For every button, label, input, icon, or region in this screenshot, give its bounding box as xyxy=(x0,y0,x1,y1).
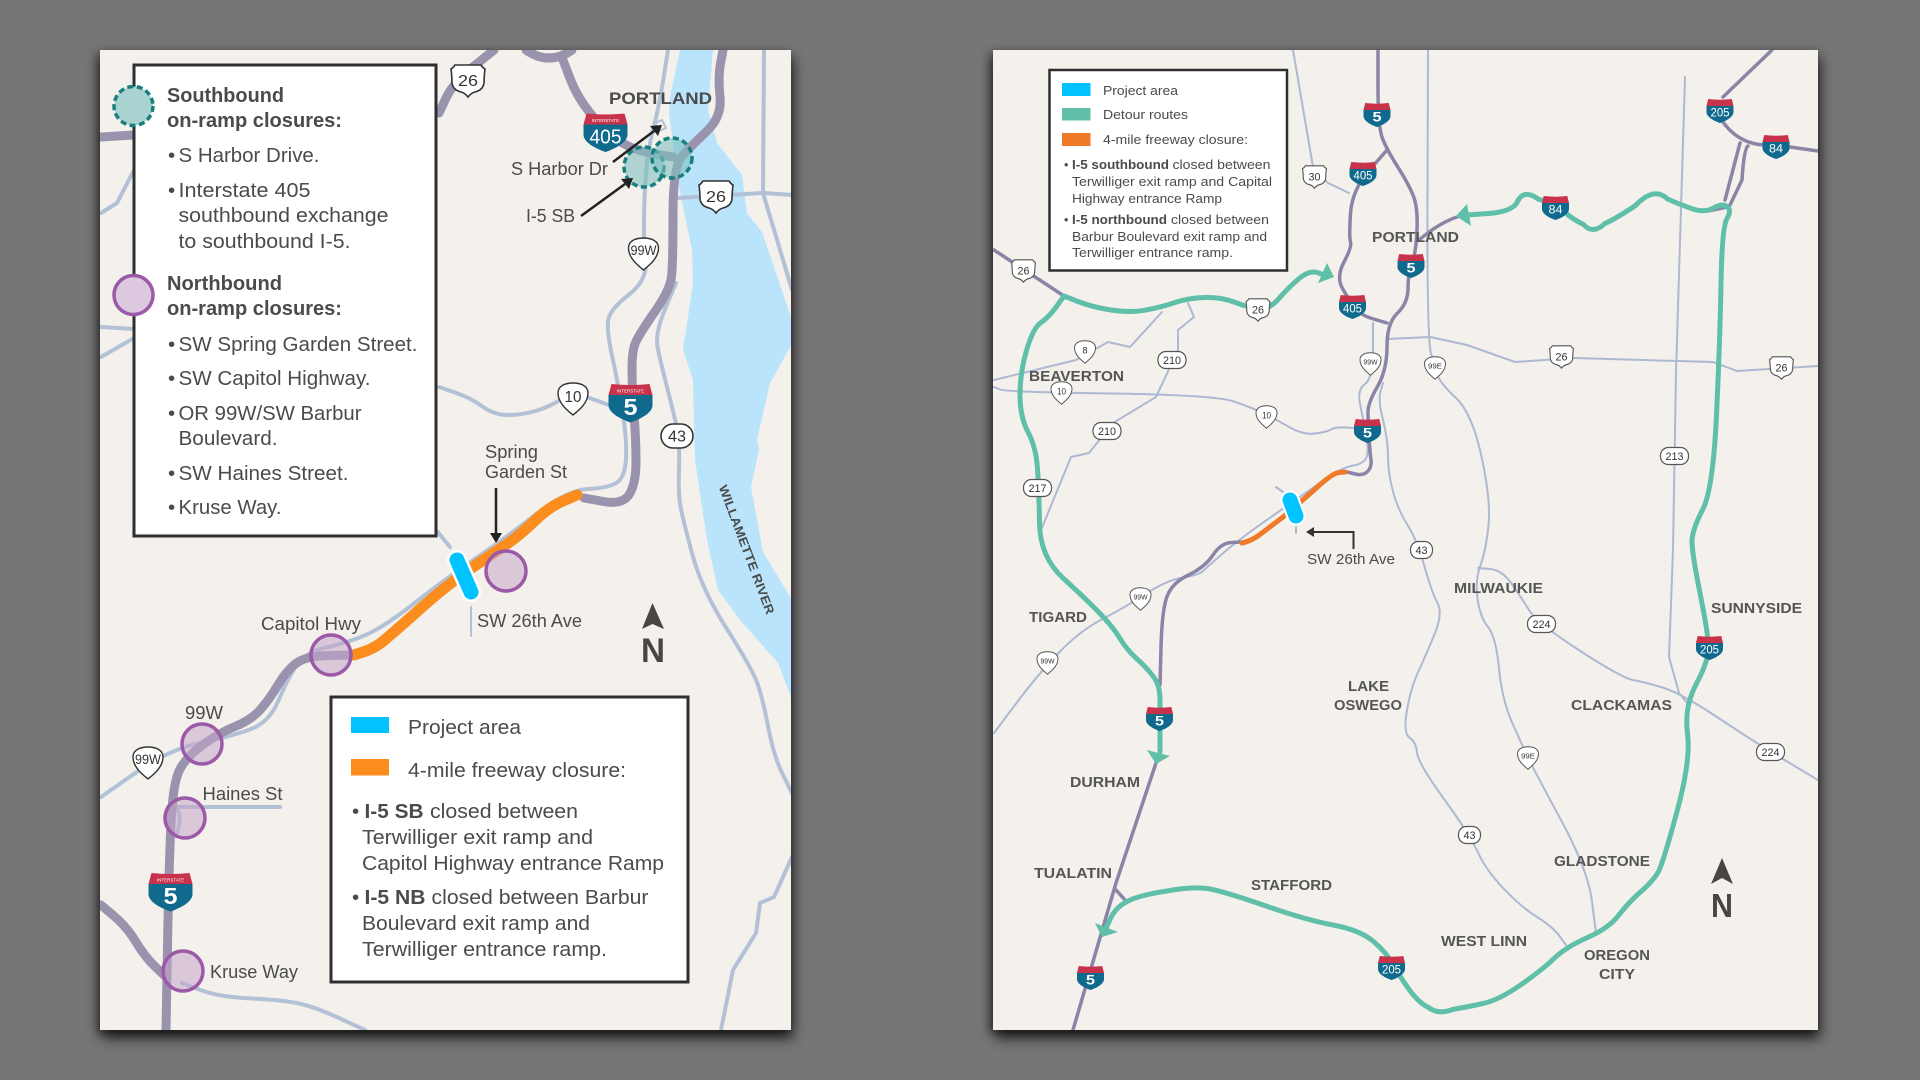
interstate shields: 5 xyxy=(1372,108,1382,124)
city labels: CLACKAMAS xyxy=(1571,698,1672,714)
shield: I-405: 405 xyxy=(590,126,622,148)
swatch: project area xyxy=(351,717,389,733)
river: Willamette xyxy=(669,50,792,700)
teardrop route shields: 99W xyxy=(1134,593,1148,602)
shield: I-405 xyxy=(584,114,628,152)
city labels xyxy=(1029,230,1802,983)
southbound closures text: Interstate 405 xyxy=(178,179,310,202)
US highway shields: 26 xyxy=(1776,363,1787,374)
city labels: OREGON xyxy=(1584,948,1650,964)
interstate shields: 205 xyxy=(1700,642,1719,656)
shield: US 26 xyxy=(451,65,485,97)
minor roads xyxy=(994,50,1818,945)
freeways xyxy=(101,50,723,1030)
legend: detour map: Detour routes xyxy=(1103,108,1188,122)
shield: I-405: INTERSTATE xyxy=(592,118,619,123)
legend: detour map: Project area xyxy=(1103,84,1178,98)
southbound closures text: on-ramp closures: xyxy=(167,109,342,132)
north arrow: N xyxy=(641,632,665,670)
shield: US 26 east xyxy=(699,181,733,213)
map labels: Spring xyxy=(485,442,538,462)
southbound closures text: • xyxy=(168,179,175,202)
city labels: TIGARD xyxy=(1029,610,1087,626)
shield: 99W north xyxy=(628,238,658,270)
state route pills: 224 xyxy=(1762,747,1780,759)
legend: project area and freeway closure: Capitol Highway entrance Ramp xyxy=(362,852,664,875)
city labels: OSWEGO xyxy=(1334,698,1402,714)
legend: project area and freeway closure: I-5 SB xyxy=(364,800,424,823)
legend: project area and freeway closure: Boulevard exit ramp and xyxy=(362,912,590,935)
map labels: Haines St xyxy=(202,784,282,804)
panel: on-ramp closures map xyxy=(100,50,791,1030)
northbound closures text: SW Haines Street. xyxy=(178,462,348,485)
detour route: west xyxy=(1020,296,1170,764)
northbound closures text: on-ramp closures: xyxy=(167,297,342,320)
map labels: SW 26th Ave xyxy=(477,611,582,631)
legend: detour map: • xyxy=(1064,158,1068,172)
teardrop route shields: 99E xyxy=(1521,752,1535,761)
city labels: GLADSTONE xyxy=(1554,854,1650,870)
map labels: 99W xyxy=(185,703,223,723)
legend: detour map: Highway entrance Ramp xyxy=(1072,192,1222,206)
legend: project area and freeway closure: Project area xyxy=(408,716,522,739)
city labels: LAKE xyxy=(1348,679,1389,695)
map labels: Capitol Hwy xyxy=(261,614,361,634)
US highway shields: 30 xyxy=(1309,172,1320,183)
swatch: project area xyxy=(1062,83,1090,96)
legend: project area and freeway closure: closed between Barbur xyxy=(432,886,649,909)
map labels: I-5 SB xyxy=(526,206,575,226)
shield: US 26: 26 xyxy=(458,73,478,90)
US highway shields: 26 xyxy=(1252,305,1264,316)
northbound closures text: • xyxy=(168,333,175,356)
swatch: freeway closure xyxy=(351,759,389,776)
northbound closures text: Northbound xyxy=(167,272,282,295)
shield: I-5 north: 5 xyxy=(623,394,638,420)
state route pills: 217 xyxy=(1028,483,1046,495)
city labels: MILWAUKIE xyxy=(1454,581,1543,597)
state route pills: 210 xyxy=(1163,355,1181,367)
arrowhead: I-5 Tualatin xyxy=(1095,923,1118,937)
northbound closures text: • xyxy=(168,367,175,390)
north arrow xyxy=(641,603,665,670)
arrow: SW 26th Ave xyxy=(1306,527,1354,549)
state route pills: 213 xyxy=(1666,451,1684,463)
city labels: SUNNYSIDE xyxy=(1711,601,1802,617)
swatch: detour routes xyxy=(1062,108,1090,120)
southbound closures text: Southbound xyxy=(167,84,284,107)
city labels: BEAVERTON xyxy=(1029,369,1124,385)
teardrop route shields: 99E xyxy=(1428,362,1442,371)
interstate shields xyxy=(1077,99,1790,990)
state route pills: 43 xyxy=(1464,830,1476,842)
label: SW 26th Ave: SW 26th Ave xyxy=(1307,551,1395,568)
legend: detour map: 4-mile freeway closure: xyxy=(1103,133,1248,147)
project area bar xyxy=(457,560,471,592)
shield: I-5 north xyxy=(608,384,652,422)
state route pills: 43 xyxy=(1416,545,1428,557)
northbound closures text: Kruse Way. xyxy=(178,496,282,519)
state route pills: 210 xyxy=(1098,426,1116,438)
shield: I-5 south: 5 xyxy=(163,883,178,909)
arrowhead: I-84 xyxy=(1456,204,1471,226)
map labels xyxy=(185,89,712,982)
interstate shields: 405 xyxy=(1354,168,1373,182)
legend: project area and freeway closure: I-5 NB xyxy=(364,886,426,909)
interstate shields: 205 xyxy=(1710,106,1730,120)
freeway closure segment xyxy=(354,495,577,655)
legend: project area and freeway closure: 4-mile freeway closure: xyxy=(408,759,626,782)
southbound closures text: to southbound I-5. xyxy=(178,230,350,253)
northbound closures text: Boulevard. xyxy=(178,427,278,450)
interstate shields: 405 xyxy=(1343,302,1362,316)
interstate shields: 5 xyxy=(1086,972,1095,988)
legend: project area and freeway closure xyxy=(331,697,688,982)
project area bar xyxy=(1290,500,1296,516)
teardrop route shields: 10 xyxy=(1057,386,1066,396)
interstate shields: 5 xyxy=(1155,712,1164,728)
southbound closures text: S Harbor Drive. xyxy=(178,144,320,167)
map labels: Garden St xyxy=(485,462,567,482)
legend: detour map: I-5 southbound xyxy=(1072,158,1169,172)
state route pills: 224 xyxy=(1532,619,1550,631)
legend: detour map: I-5 northbound xyxy=(1072,213,1167,227)
city labels: STAFFORD xyxy=(1251,878,1332,894)
icon: southbound circle xyxy=(114,86,153,126)
map labels: Kruse Way xyxy=(210,962,298,982)
freeway closure segment xyxy=(1242,472,1345,543)
northbound closures text xyxy=(167,272,418,519)
arrow: I-5 SB xyxy=(581,178,633,216)
arrow: Spring Garden St xyxy=(490,488,502,543)
northbound closures text: • xyxy=(168,496,175,519)
interstate shields: 5 xyxy=(1406,260,1416,276)
state route pills xyxy=(1024,352,1784,844)
southbound closures text: • xyxy=(168,144,175,167)
southbound closures text xyxy=(167,84,388,253)
legend: project area and freeway closure: Terwilliger exit ramp and xyxy=(362,826,593,849)
northbound closures text: • xyxy=(168,402,175,425)
north arrow xyxy=(1711,858,1733,924)
teardrop route shields: 10 xyxy=(1262,410,1271,420)
northbound closures text: SW Spring Garden Street. xyxy=(178,333,418,356)
legend: detour map: Terwilliger entrance ramp. xyxy=(1072,246,1233,260)
southbound closures text: southbound exchange xyxy=(178,204,388,227)
icon: northbound circle xyxy=(114,276,153,314)
shield: OR 10: 10 xyxy=(564,389,582,406)
city labels: PORTLAND xyxy=(1372,230,1459,246)
northbound closures text: • xyxy=(168,462,175,485)
legend: detour map: • xyxy=(1064,213,1068,227)
legend: project area and freeway closure: Terwilliger entrance ramp. xyxy=(362,938,607,961)
panel: detour routes map xyxy=(993,50,1818,1030)
shield: I-5 south: INTERSTATE xyxy=(157,878,184,882)
legend: detour map: closed between xyxy=(1172,158,1271,172)
freeways xyxy=(994,50,1818,1030)
teardrop route shields xyxy=(1037,341,1538,769)
teardrop route shields: 99W xyxy=(1364,358,1378,367)
teardrop route shields: 99W xyxy=(1041,657,1055,666)
shield: 99W north: 99W xyxy=(630,242,657,258)
interstate shields: 84 xyxy=(1548,202,1563,216)
detour route: east loop xyxy=(1106,194,1730,1012)
US highway shields: 26 xyxy=(1018,266,1029,277)
city labels: DURHAM xyxy=(1070,775,1140,791)
legend: detour map xyxy=(1050,70,1287,270)
US highway shields xyxy=(1012,166,1793,379)
shield: 99W south xyxy=(133,747,163,779)
swatch: freeway closure xyxy=(1062,133,1090,146)
interstate shields: 5 xyxy=(1363,424,1372,440)
legend: detour map: Terwilliger exit ramp and Capital xyxy=(1072,175,1272,189)
legend: project area and freeway closure: • xyxy=(352,886,359,909)
legend: detour map: Barbur Boulevard exit ramp and xyxy=(1072,230,1267,244)
shield: I-5 north: INTERSTATE xyxy=(617,388,644,394)
US highway shields: 26 xyxy=(1556,352,1567,363)
northbound closures text: OR 99W/SW Barbur xyxy=(178,402,362,425)
minor roads xyxy=(101,50,792,1030)
teardrop route shields: 8 xyxy=(1082,345,1088,355)
northbound closures text: SW Capitol Highway. xyxy=(178,367,370,390)
north arrow: N xyxy=(1711,887,1733,924)
interstate shields: 205 xyxy=(1382,962,1401,976)
arrow: S Harbor Dr xyxy=(613,125,662,162)
river label: WILLAMETTE RIVER xyxy=(716,483,777,616)
map labels: PORTLAND xyxy=(609,89,712,108)
shield: OR 10 xyxy=(558,383,588,415)
legend: detour map: closed between xyxy=(1171,213,1269,227)
map labels: S Harbor Dr xyxy=(511,159,608,179)
northbound closure circles xyxy=(163,551,526,991)
city labels: TUALATIN xyxy=(1034,866,1112,882)
legend: project area and freeway closure: • xyxy=(352,800,359,823)
shield: OR 43: 43 xyxy=(668,428,686,446)
legend: on-ramp closures xyxy=(114,65,436,536)
detour route: north xyxy=(1064,263,1334,312)
shield: OR 43 xyxy=(661,424,693,448)
city labels: WEST LINN xyxy=(1441,934,1527,950)
shield: I-5 south xyxy=(148,873,192,912)
legend: project area and freeway closure: closed between xyxy=(430,800,578,823)
interstate shields: 84 xyxy=(1769,142,1783,156)
shield: 99W south: 99W xyxy=(135,751,162,767)
city labels: CITY xyxy=(1599,967,1635,983)
shield: US 26 east: 26 xyxy=(706,189,726,206)
southbound closure circles xyxy=(624,138,692,187)
